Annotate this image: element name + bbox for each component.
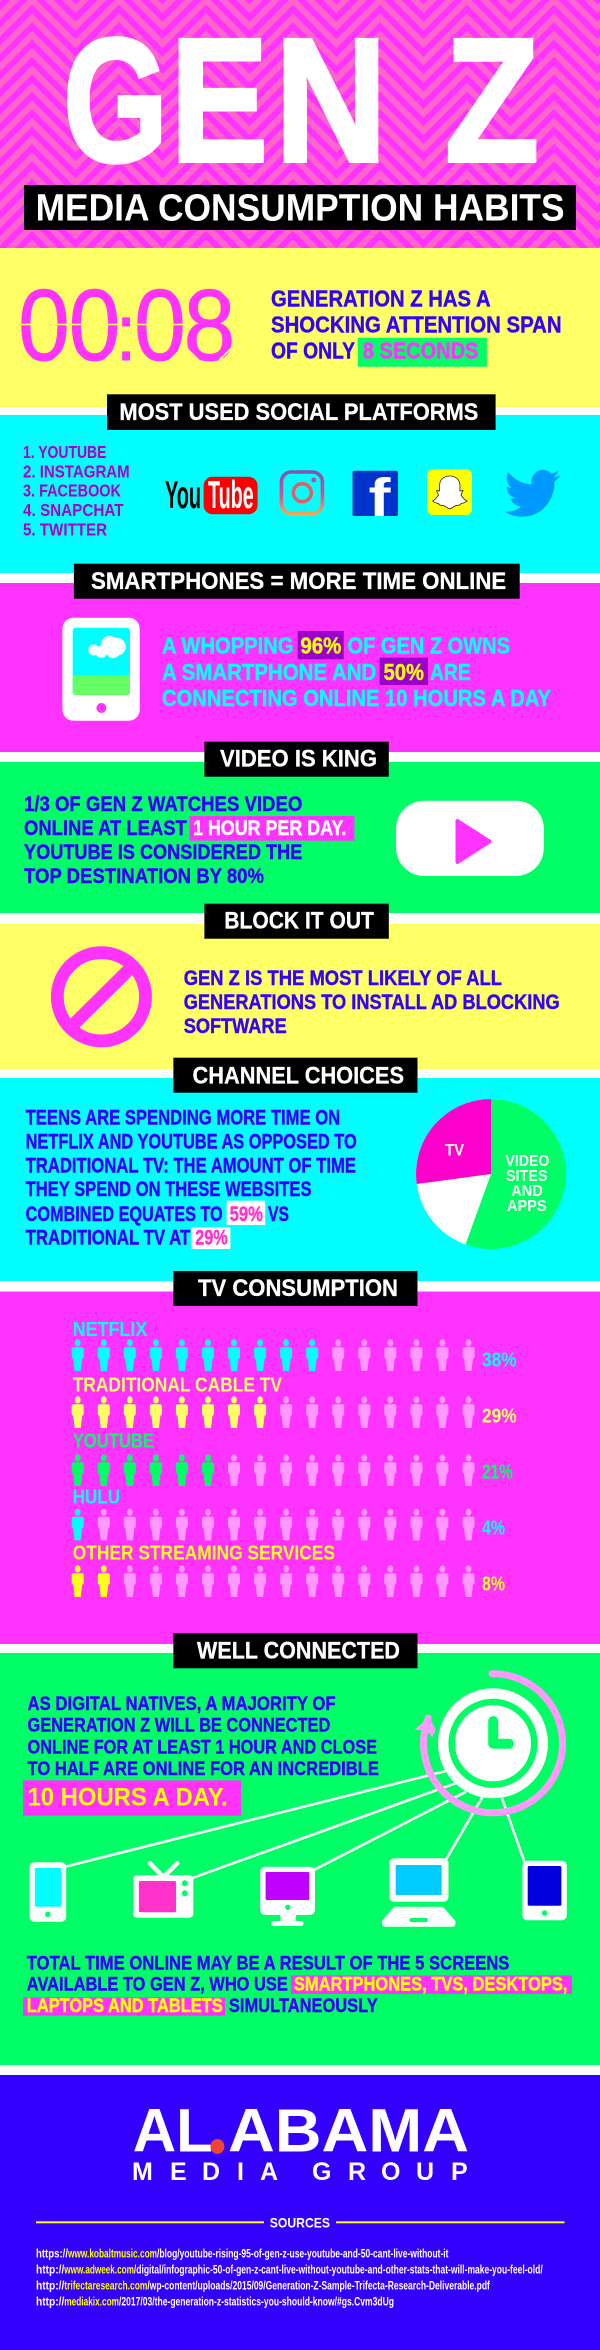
pie chart: APPS bbox=[507, 1198, 547, 1215]
title: GEN Z: N bbox=[275, 3, 387, 199]
attention span text bbox=[271, 286, 562, 367]
channel choices text: TRADITIONAL TV AT bbox=[26, 1226, 190, 1249]
source links: http:// bbox=[36, 2278, 65, 2292]
source links: http:// bbox=[36, 2262, 65, 2276]
heading: channel choices bbox=[173, 1058, 418, 1093]
attention span text: GENERATION Z HAS A bbox=[271, 286, 491, 312]
source links bbox=[36, 2246, 543, 2308]
five screens text: LAPTOPS AND TABLETS bbox=[27, 1995, 223, 2017]
pie chart: AND bbox=[511, 1183, 543, 1200]
channel choices text: TEENS ARE SPENDING MORE TIME ON bbox=[26, 1107, 340, 1130]
digital natives text: ONLINE FOR AT LEAST 1 HOUR AND CLOSE bbox=[28, 1736, 377, 1758]
source links: trifectaresearch.com bbox=[64, 2278, 147, 2292]
ranked list: 1. YOUTUBE bbox=[23, 442, 106, 462]
callout: 10 hours a day: 10 HOURS A DAY. bbox=[28, 1784, 228, 1812]
five screens text bbox=[23, 1952, 572, 2017]
smartphone statistic text: A WHOPPING bbox=[162, 632, 294, 658]
panel: well connected bbox=[23, 1674, 572, 2017]
connection lines bbox=[65, 1771, 524, 1878]
video statistic text: TOP DESTINATION BY 80% bbox=[24, 865, 264, 888]
video statistic text bbox=[24, 793, 354, 888]
ranked list bbox=[23, 442, 130, 539]
row: Other Streaming Services 8%: 8% bbox=[482, 1574, 505, 1596]
icon: desktop computer bbox=[260, 1867, 315, 1926]
ad blocking text: GEN Z IS THE MOST LIKELY OF ALL bbox=[184, 967, 502, 990]
row: YouTube 21%: 21% bbox=[482, 1462, 513, 1484]
smartphone statistic text: 96% bbox=[300, 632, 341, 658]
row: YouTube 21%: YOUTUBE bbox=[73, 1430, 154, 1452]
five screens text: AVAILABLE TO GEN Z, WHO USE bbox=[27, 1974, 288, 1996]
source links: www.kobaltmusic.com bbox=[67, 2246, 157, 2260]
row: Hulu 4%: HULU bbox=[73, 1486, 120, 1508]
icon: smartphone bbox=[62, 618, 140, 721]
icon: Instagram logo bbox=[281, 472, 322, 514]
digital natives text: AS DIGITAL NATIVES, A MAJORITY OF bbox=[28, 1693, 336, 1715]
digital timer 00:08: 0 bbox=[134, 268, 186, 382]
subtitle bar: MEDIA CONSUMPTION HABITS bbox=[36, 188, 565, 230]
row: Netflix 38% bbox=[72, 1319, 517, 1372]
icon: Facebook logo: f bbox=[368, 468, 392, 528]
channel choices text: TRADITIONAL TV: THE AMOUNT OF TIME bbox=[26, 1154, 356, 1177]
smartphone statistic text bbox=[162, 631, 551, 711]
channel choices text: VS bbox=[268, 1203, 289, 1226]
icon: Twitter bird bbox=[504, 470, 560, 517]
heading: tv consumption: TV CONSUMPTION bbox=[198, 1275, 398, 1302]
video statistic text: YOUTUBE IS CONSIDERED THE bbox=[24, 841, 302, 864]
heading: video is king: VIDEO IS KING bbox=[220, 746, 377, 773]
ad blocking text bbox=[184, 967, 560, 1038]
five screens text: SIMULTANEOUSLY bbox=[229, 1995, 378, 2017]
ad blocking text: SOFTWARE bbox=[184, 1015, 287, 1038]
heading: well connected: WELL CONNECTED bbox=[197, 1637, 400, 1664]
channel choices text bbox=[26, 1107, 357, 1249]
panel: header with chevron background bbox=[0, 0, 600, 248]
source links: https:// bbox=[36, 2246, 69, 2260]
digital timer 00:08: 0 bbox=[69, 268, 120, 382]
sources heading: SOURCES bbox=[270, 2215, 330, 2231]
smartphone statistic text: 50% bbox=[384, 659, 424, 685]
title: GEN Z: E bbox=[170, 3, 268, 199]
icon: clock with circular arrow bbox=[414, 1674, 563, 1813]
digital timer 00:08: 0 bbox=[18, 268, 70, 382]
channel choices text: NETFLIX AND YOUTUBE AS OPPOSED TO bbox=[26, 1131, 357, 1154]
heading: channel choices: CHANNEL CHOICES bbox=[192, 1062, 404, 1089]
attention span text: SHOCKING ATTENTION SPAN bbox=[271, 312, 562, 338]
panel: block it out bbox=[57, 953, 560, 1041]
ranked list: 2. INSTAGRAM bbox=[23, 461, 130, 481]
panel: smartphones bbox=[62, 618, 551, 721]
pie chart: TV bbox=[445, 1141, 465, 1160]
pie chart: VIDEO bbox=[505, 1153, 549, 1170]
digital natives text: GENERATION Z WILL BE CONNECTED bbox=[28, 1715, 330, 1737]
panel: channel choices bbox=[26, 1099, 566, 1249]
logo: Alabama Media Group: MEDIA GROUP bbox=[132, 2158, 468, 2186]
icon: Facebook logo bbox=[352, 468, 398, 528]
icon: YouTube logo: You bbox=[165, 474, 201, 517]
icon: smartphone bbox=[30, 1862, 66, 1922]
source links: /2017/03/the-generation-z-statistics-you-should-know/#gs.Cvm3dUg bbox=[119, 2294, 394, 2308]
panel: social platforms bbox=[23, 442, 560, 539]
panel: video is king bbox=[24, 793, 544, 888]
title: GEN Z: G bbox=[63, 3, 168, 199]
logo: Alabama Media Group bbox=[132, 2097, 469, 2186]
panel: tv consumption pictogram chart bbox=[72, 1319, 517, 1597]
digital timer 00:08 bbox=[18, 268, 235, 382]
heading: most used social platforms: MOST USED SOCIAL PLATFORMS bbox=[119, 399, 478, 426]
title: GEN Z: Z bbox=[445, 3, 539, 199]
ranked list: 3. FACEBOOK bbox=[23, 481, 121, 501]
icon: television bbox=[133, 1863, 193, 1918]
digital timer 00:08: 8 bbox=[184, 268, 235, 382]
icon: play button bbox=[396, 801, 544, 876]
row: Other Streaming Services 8%: OTHER STREAMING SERVICES bbox=[73, 1542, 335, 1564]
icon: Snapchat logo bbox=[427, 469, 472, 515]
digital natives text bbox=[28, 1693, 379, 1780]
row: Netflix 38%: 38% bbox=[482, 1350, 517, 1372]
digital natives text: TO HALF ARE ONLINE FOR AN INCREDIBLE bbox=[28, 1758, 379, 1780]
icon: tablet bbox=[522, 1861, 567, 1920]
pie chart bbox=[416, 1099, 566, 1249]
five screens text: TOTAL TIME ONLINE MAY BE A RESULT OF THE 5 SCREENS bbox=[27, 1952, 509, 1974]
source links: mediakix.com bbox=[64, 2294, 119, 2308]
channel choices text: 29% bbox=[195, 1226, 228, 1249]
row: Traditional Cable TV 29%: TRADITIONAL CABLE TV bbox=[73, 1375, 283, 1397]
channel choices text: 59% bbox=[230, 1203, 263, 1226]
channel choices text: COMBINED EQUATES TO bbox=[26, 1203, 223, 1226]
digital timer 00:08: : bbox=[116, 288, 136, 378]
heading: smartphones: SMARTPHONES = MORE TIME ONLINE bbox=[91, 568, 506, 595]
video statistic text: 1 HOUR PER DAY. bbox=[193, 817, 346, 840]
ranked list: 5. TWITTER bbox=[23, 519, 107, 539]
smartphone statistic text: CONNECTING ONLINE 10 HOURS A DAY bbox=[162, 685, 551, 711]
icon: laptop bbox=[382, 1858, 455, 1927]
row: Traditional Cable TV 29%: 29% bbox=[482, 1406, 517, 1428]
row: Traditional Cable TV 29% bbox=[72, 1375, 517, 1428]
row: Hulu 4% bbox=[72, 1486, 505, 1540]
icon: YouTube logo: Tube bbox=[208, 474, 254, 517]
ranked list: 4. SNAPCHAT bbox=[23, 500, 124, 520]
attention span text: 8 SECONDS bbox=[363, 338, 478, 364]
heading: block it out: BLOCK IT OUT bbox=[224, 908, 374, 935]
smartphone statistic text: ARE bbox=[430, 659, 471, 685]
row: Other Streaming Services 8% bbox=[72, 1542, 505, 1597]
source links: http:// bbox=[36, 2294, 65, 2308]
logo: Alabama Media Group: ABAMA bbox=[228, 2097, 469, 2166]
icon: prohibition sign bbox=[57, 953, 146, 1041]
heading: video is king bbox=[204, 742, 389, 777]
row: YouTube 21% bbox=[72, 1430, 513, 1486]
pie chart: SITES bbox=[506, 1168, 548, 1185]
attention span text: OF ONLY bbox=[271, 338, 355, 364]
video statistic text: 1/3 OF GEN Z WATCHES VIDEO bbox=[24, 793, 302, 816]
logo: Alabama Media Group: AL bbox=[133, 2097, 213, 2166]
video statistic text: ONLINE AT LEAST bbox=[24, 817, 187, 840]
source links: /blog/youtube-rising-95-of-gen-z-use-youtube-and-50-cant-live-without-it bbox=[157, 2246, 448, 2260]
row: Netflix 38%: NETFLIX bbox=[73, 1319, 148, 1341]
heading: tv consumption bbox=[173, 1271, 418, 1306]
smartphone statistic text: A SMARTPHONE AND bbox=[162, 659, 376, 685]
panel: footer bbox=[36, 2097, 564, 2308]
panel: attention span bbox=[18, 268, 562, 382]
smartphone statistic text: OF GEN Z OWNS bbox=[348, 632, 510, 658]
source links: www.adweek.com bbox=[64, 2262, 134, 2276]
heading: well connected bbox=[173, 1633, 418, 1668]
row: Hulu 4%: 4% bbox=[482, 1518, 505, 1540]
heading: block it out bbox=[204, 904, 389, 939]
channel choices text: THEY SPEND ON THESE WEBSITES bbox=[26, 1178, 311, 1201]
